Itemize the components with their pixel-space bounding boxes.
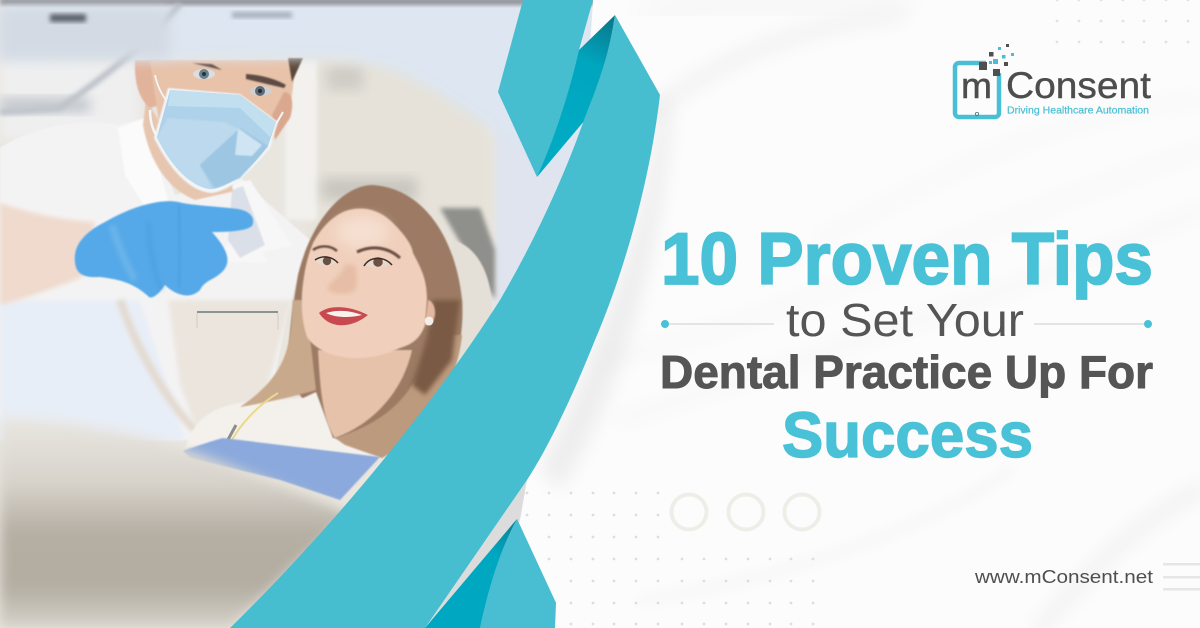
logo tagline: Driving Healthcare Automation [1007,104,1149,116]
dot grid: top right [1056,0,1189,43]
patient blue bib [183,438,380,500]
dentist neck and head [135,58,303,200]
logo wordmark Consent: Consent [1006,65,1152,106]
blurred foreground equipment [0,418,350,628]
patient chair [456,242,492,297]
logo wordmark m: m [961,65,992,106]
ribbon fold: bottom [425,519,556,628]
ribbon fold: top dark [537,15,615,177]
forearm [0,203,95,305]
blonde hair strands [224,300,462,458]
collar and tissue [228,180,264,258]
surgical mask [150,75,283,193]
blue glove [75,201,253,298]
patient face [302,209,435,358]
rule right [1034,320,1152,328]
heading: Success: Success [782,399,1033,471]
decorative lines at url [1163,563,1200,590]
ribbon: top strip [498,0,593,177]
decorative three circles [672,494,820,530]
background: soft white fabric [658,3,1198,626]
subheading row: to Set Your with rules [661,294,1152,346]
patient neck [318,350,412,438]
blurred overhead lamp [0,0,593,130]
patient white top [185,392,380,460]
dot grid: bottom [526,492,814,625]
subheading text: to Set Your [786,294,1024,346]
patient hair back [289,185,462,455]
heading: Dental Practice Up For: Dental Practice Up For [660,346,1153,398]
clinic wall background [0,0,600,628]
website url: www.mConsent.net [974,567,1153,587]
photo: dentist and patient [0,0,600,628]
dentist shirt [0,118,310,440]
ribbon shadow on background [540,94,672,490]
rule left [661,320,774,328]
logo pixel squares [979,44,1014,76]
ribbon: lower sliver shadow [425,480,527,628]
logo tablet icon [955,58,1002,117]
ribbon: main sweep [230,15,660,628]
heading: 10 Proven Tips: 10 Proven Tips [661,219,1153,300]
logo: mConsent [955,44,1152,117]
